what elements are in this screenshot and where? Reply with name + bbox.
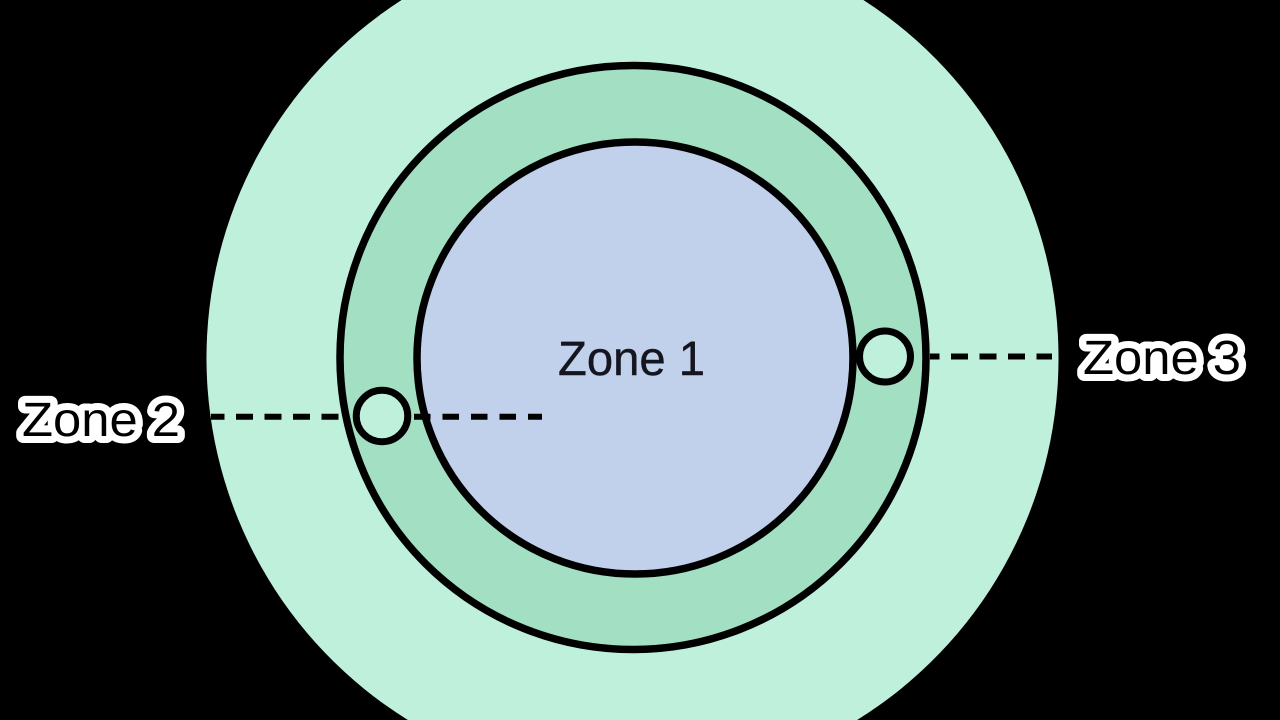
label: zone 3: Zone 3 bbox=[1083, 332, 1241, 385]
marker: zone 2 bbox=[356, 390, 408, 442]
inner circle: zone 1 area bbox=[417, 142, 853, 574]
middle ring: zone 2 area bbox=[340, 66, 926, 650]
label: zone 2: Zone 2 bbox=[22, 394, 180, 447]
dashed line: zone 3 bbox=[930, 354, 1052, 360]
label: zone 1: Zone 1 bbox=[558, 333, 705, 386]
label: zone 3: Zone 3 bbox=[1083, 332, 1241, 385]
outer circle: zone 3 area bbox=[206, 0, 1059, 720]
marker: zone 3 bbox=[860, 331, 910, 382]
label: zone 2: Zone 2 bbox=[22, 394, 180, 447]
dashed line: zone 2 bbox=[211, 414, 542, 420]
